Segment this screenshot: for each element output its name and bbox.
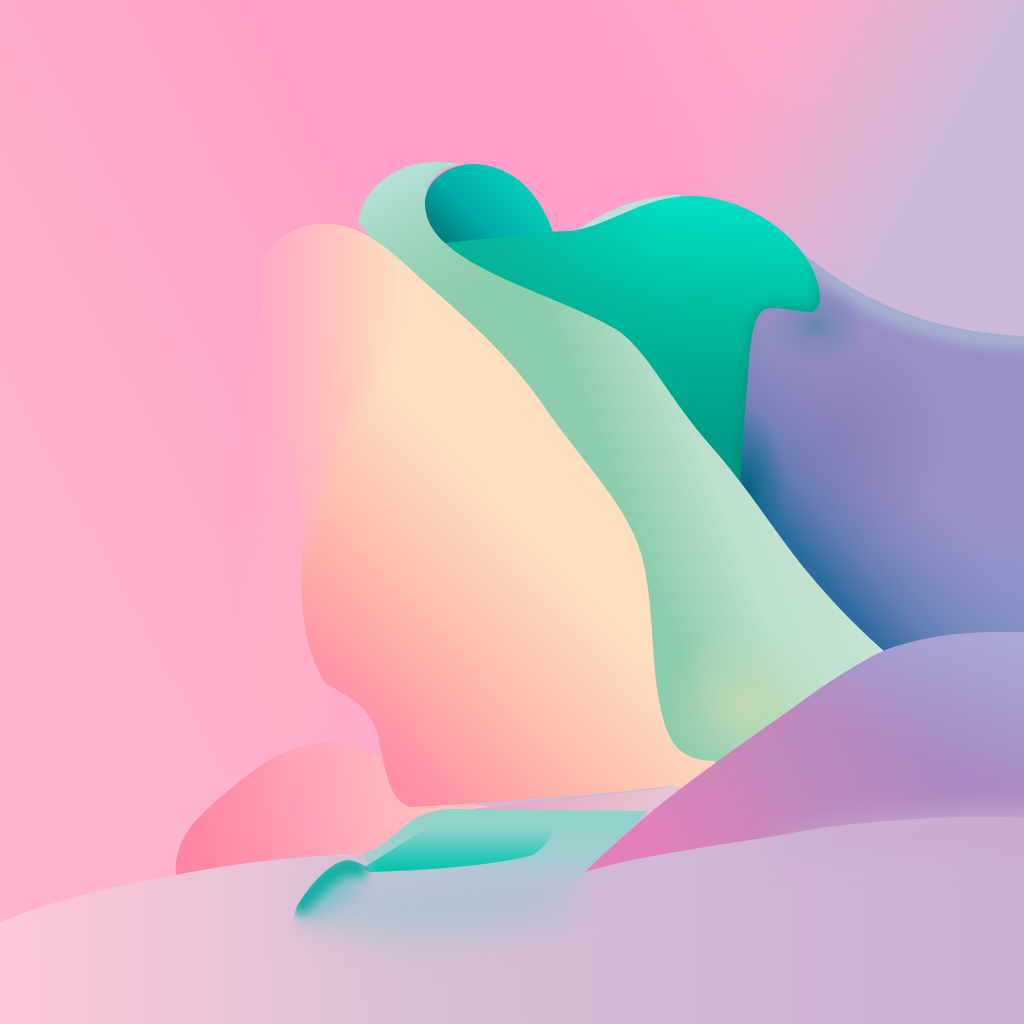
blue violet wave — [740, 254, 1024, 651]
dark teal rounded dome — [425, 164, 553, 243]
lower-left pink mound — [176, 742, 510, 880]
ground — [0, 817, 1024, 1024]
pale lavender sliver — [430, 783, 700, 815]
pale mint crest behind green — [578, 195, 680, 235]
green wave — [444, 196, 820, 482]
purple hill — [585, 632, 1024, 900]
mint ribbon — [350, 155, 890, 785]
pale pink halo left of peach — [262, 300, 330, 770]
peach form — [262, 224, 716, 807]
soft transition between hill and ground — [770, 808, 1024, 850]
teal stream band — [362, 826, 553, 872]
teal water pool — [362, 809, 648, 905]
teal haze on the ground — [310, 871, 590, 935]
teal stream tail — [296, 866, 366, 912]
